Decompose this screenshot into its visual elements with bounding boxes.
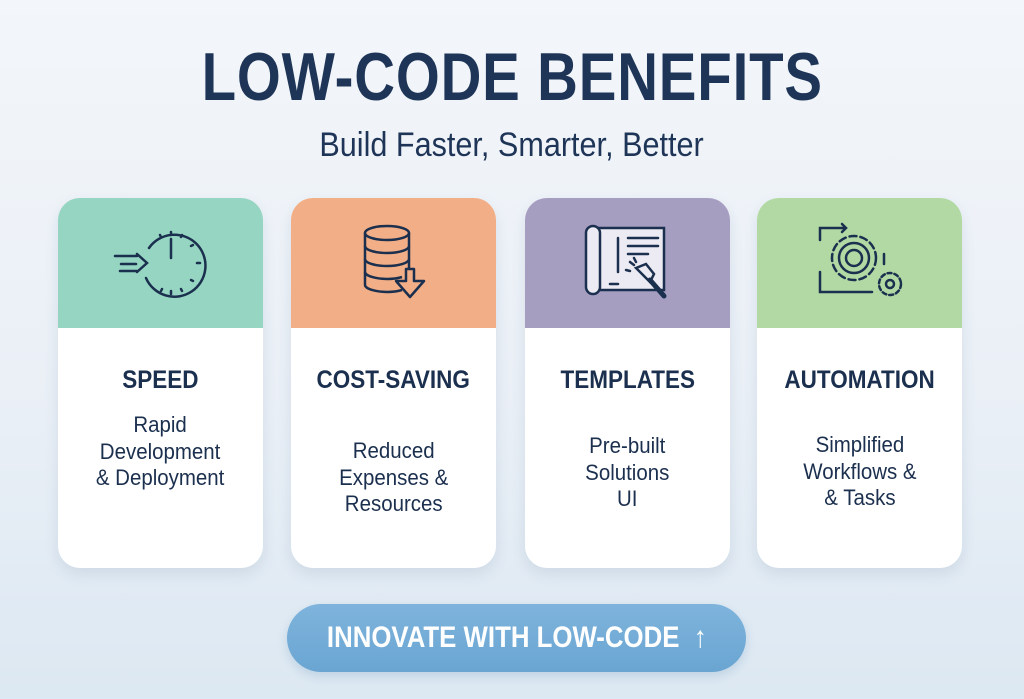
text: speed: & Deployment — [96, 465, 225, 490]
button: innovate: INNOVATE WITH LOW-CODE ↑ — [327, 621, 706, 654]
heading: templates: TEMPLATES — [560, 366, 695, 394]
text: automation: & Tasks — [824, 485, 895, 510]
icon: clock with speed arrow — [114, 230, 207, 298]
text: templates: UI — [617, 486, 638, 511]
header band: speed — [58, 198, 263, 328]
text: cost-saving: Expenses & — [339, 464, 448, 490]
text: cost-saving: Resources — [345, 491, 442, 516]
text: cost-saving — [339, 438, 448, 516]
text: speed — [96, 412, 225, 490]
header band: cost — [291, 198, 496, 328]
text: automation: Workflows & — [803, 458, 916, 484]
panel: speed — [58, 198, 263, 568]
subtitle: Build Faster, Smarter, Better — [320, 126, 704, 164]
text: automation — [803, 432, 916, 510]
heading: speed: SPEED — [122, 366, 199, 394]
text: cost-saving: Reduced — [353, 438, 434, 463]
icon: blueprint with brush — [584, 224, 666, 298]
header band: templates — [525, 198, 730, 328]
text: templates: Solutions — [585, 460, 670, 484]
text: automation: Simplified — [815, 432, 904, 457]
title: LOW-CODE BENEFITS — [201, 39, 823, 115]
icon: gears with arrows — [818, 222, 902, 296]
icon: database with down arrow — [364, 224, 426, 298]
text: templates — [585, 433, 670, 511]
text: templates: Pre-built — [589, 433, 666, 458]
button: innovate — [287, 604, 746, 672]
heading: cost-saving: COST-SAVING — [317, 366, 470, 394]
text: speed: Rapid — [134, 412, 187, 437]
text: speed: Development — [100, 438, 221, 464]
header band: automation — [757, 198, 962, 328]
panel: templates — [525, 198, 730, 568]
panel: cost-saving — [291, 198, 496, 568]
heading: automation: AUTOMATION — [784, 366, 935, 394]
panel: automation — [757, 198, 962, 568]
